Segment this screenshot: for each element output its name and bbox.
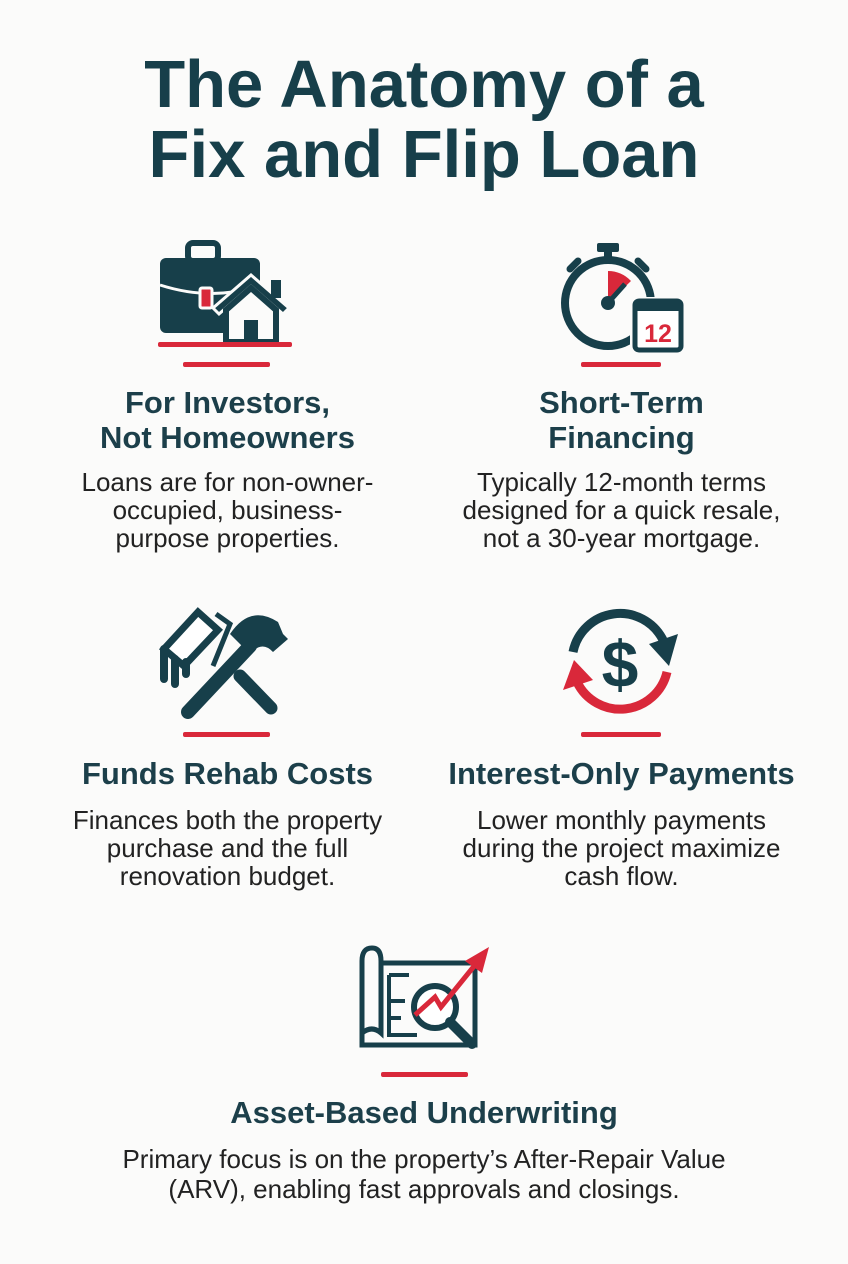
text: Finances both the property bbox=[73, 805, 382, 835]
text bbox=[122, 1144, 726, 1204]
panel: asset-based bbox=[122, 946, 726, 1204]
heading: Interest-Only Payments bbox=[448, 756, 795, 791]
icon: dollar cycle bbox=[563, 608, 678, 714]
text: Primary focus is on the property’s After-Repair Value bbox=[122, 1144, 726, 1174]
icon: dollar cycle: $ bbox=[602, 627, 638, 701]
text: cash flow. bbox=[564, 861, 679, 891]
text bbox=[463, 467, 780, 553]
icon: stopwatch with calendar bbox=[561, 243, 684, 352]
title: The Anatomy of a bbox=[144, 47, 704, 122]
heading: Funds Rehab Costs bbox=[82, 756, 373, 791]
heading bbox=[539, 385, 704, 455]
text: purpose properties. bbox=[115, 523, 340, 553]
panel: interest-only bbox=[448, 608, 795, 891]
icon: stopwatch with calendar: 12 bbox=[644, 320, 672, 348]
heading bbox=[100, 385, 355, 455]
title: Fix and Flip Loan bbox=[149, 117, 699, 192]
text bbox=[463, 805, 780, 891]
text: Lower monthly payments bbox=[477, 805, 766, 835]
text: occupied, business- bbox=[113, 495, 342, 525]
heading: Asset-Based Underwriting bbox=[230, 1095, 618, 1130]
text: (ARV), enabling fast approvals and closings. bbox=[168, 1174, 680, 1204]
text: not a 30-year mortgage. bbox=[483, 523, 760, 553]
text: designed for a quick resale, bbox=[463, 495, 780, 525]
text bbox=[82, 467, 373, 553]
heading: Financing bbox=[548, 420, 695, 455]
text bbox=[73, 805, 382, 891]
title bbox=[144, 47, 704, 192]
panel: rehab bbox=[73, 607, 382, 891]
heading: For Investors, bbox=[125, 385, 330, 420]
text: purchase and the full bbox=[107, 833, 348, 863]
text: renovation budget. bbox=[120, 861, 335, 891]
panel: short-term bbox=[463, 243, 780, 553]
panel: investors bbox=[82, 240, 373, 553]
text: Loans are for non-owner- bbox=[82, 467, 373, 497]
icon: roller and hammer bbox=[159, 607, 288, 719]
icon: briefcase and house bbox=[158, 240, 292, 347]
heading: Short-Term bbox=[539, 385, 704, 420]
text: Typically 12-month terms bbox=[477, 467, 766, 497]
icon: blueprint with magnifier bbox=[360, 946, 489, 1049]
text: during the project maximize bbox=[463, 833, 780, 863]
heading: Not Homeowners bbox=[100, 420, 355, 455]
